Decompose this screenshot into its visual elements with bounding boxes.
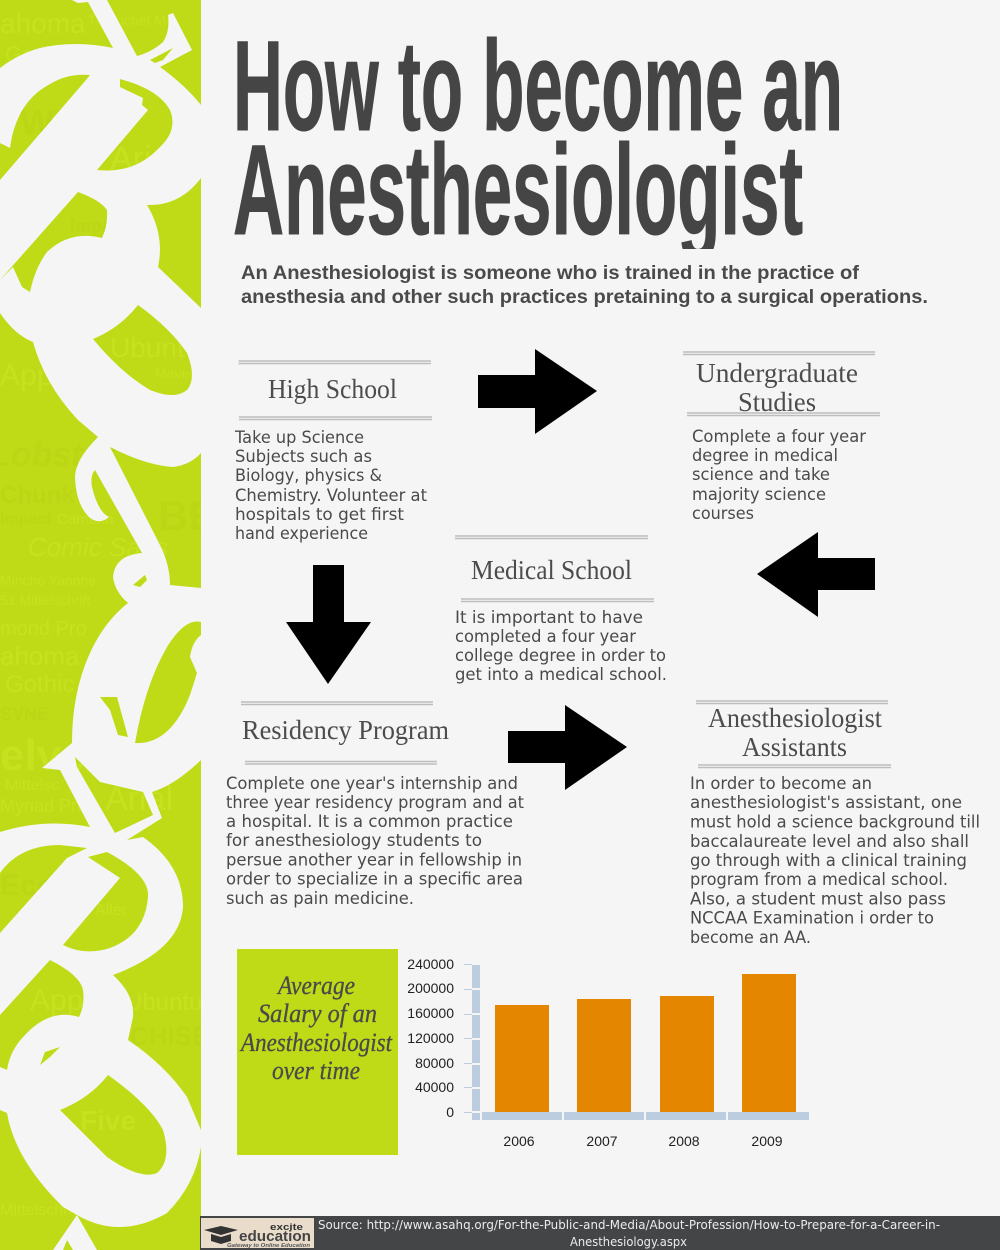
- text: High School description: Chemistry. Volunteer at: [235, 486, 428, 505]
- text: Assistants description: In order to become an: [690, 774, 872, 793]
- text: Assistants description: become an AA.: [690, 928, 811, 947]
- chart y axis labels: 0: [446, 1104, 454, 1120]
- text: Residency description: a hospital. It is a common practice: [226, 812, 513, 831]
- panel: decorative green sidebar with white letterforms: CHISE: [130, 1021, 209, 1051]
- chart x axis labels: 2007: [586, 1133, 618, 1149]
- logo: excite education: education: [239, 1228, 311, 1245]
- text: Assistants description: baccalaureate level and also shall: [690, 832, 969, 851]
- chart y axis labels: 200000: [407, 980, 454, 996]
- text: Undergraduate description: degree in medical: [692, 446, 838, 465]
- text: Residency description: three year residency program and at: [226, 793, 525, 812]
- panel: decorative green sidebar with white letterforms: Impact: [70, 216, 128, 236]
- panel: decorative green sidebar with white letterforms: Gothic: [5, 42, 69, 67]
- arrow: High School to Undergraduate Studies: [478, 349, 597, 434]
- text: Undergraduate description: [692, 427, 866, 523]
- text: salary callout label: [239, 971, 393, 1085]
- chart x axis labels: [503, 1133, 783, 1149]
- text: Undergraduate description: Complete a four year: [692, 427, 866, 446]
- text: Residency description: such as pain medicine.: [226, 889, 414, 908]
- text: Assistants description: must hold a science background till: [690, 812, 980, 832]
- text: Residency description: order to specialize in a specific area: [226, 870, 523, 888]
- text: salary callout label: Salary of an: [258, 999, 377, 1028]
- text: Assistants description: anesthesiologist's assistant, one: [690, 793, 962, 812]
- panel: decorative green sidebar with white letterforms: Mincho Yanone: [0, 572, 96, 588]
- chart y axis labels: 240000: [407, 956, 454, 972]
- logo: excite education: Gateway to Online Education: [227, 1243, 310, 1249]
- arrow: Residency Program to Anesthesiologist Assistants: [508, 705, 627, 790]
- icon: graduation cap: [204, 1226, 238, 1244]
- chart bars: [495, 974, 796, 1112]
- panel: decorative green sidebar with white letterforms: Comic Sans: [28, 532, 168, 562]
- text: High School description: Take up Science: [234, 428, 364, 447]
- heading: Medical School: Medical School: [471, 555, 632, 585]
- panel: decorative green sidebar with white letterforms: Ubuntu: [125, 989, 202, 1016]
- heading: Undergraduate Studies: Undergraduate: [696, 358, 858, 388]
- title: [234, 36, 840, 249]
- panel: decorative green sidebar with white letterforms: elve: [0, 731, 86, 780]
- heading: Anesthesiologist Assistants: [708, 703, 882, 762]
- chart x axis labels: 2009: [751, 1133, 783, 1149]
- panel: decorative green sidebar with white letterforms: Impact: [0, 511, 52, 528]
- chart x axis labels: 2006: [503, 1133, 535, 1149]
- subtitle text block: anesthesia and other such practices pretaining to a surgical operations.: [241, 286, 928, 308]
- text: High School description: Subjects such as: [235, 447, 372, 466]
- text: salary callout label: over time: [272, 1056, 360, 1085]
- panel: decorative green sidebar with white letterforms: [0, 0, 216, 1250]
- panel: Anesthesiologist Assistants: [690, 701, 980, 947]
- heading: High School: High School: [268, 374, 397, 404]
- text: High School description: hand experience: [235, 524, 368, 543]
- panel: decorative green sidebar with white letterforms: Apple: [0, 359, 77, 392]
- heading: Anesthesiologist Assistants: Anesthesiologist: [708, 703, 882, 733]
- text: Assistants description: Also, a student must also pass: [690, 890, 946, 908]
- panel: High School: [234, 361, 432, 543]
- panel: decorative green sidebar with white letterforms: BE: [158, 492, 216, 539]
- source text: Anesthesiology.aspx: [570, 1234, 687, 1249]
- panel: decorative green sidebar with white letterforms: Aller: [95, 902, 128, 919]
- chart y axis labels: 80000: [415, 1055, 454, 1071]
- text: Undergraduate description: majority science: [692, 485, 826, 504]
- chart x axis labels: 2008: [668, 1133, 700, 1149]
- text: Medical School description: [455, 608, 667, 684]
- logo: excite education: [201, 1218, 314, 1249]
- source text: Source: http://www.asahq.org/For-the-Public-and-Media/About-Profession/How-to-Prepare-for-a-Career-in-: [318, 1217, 940, 1232]
- text: Assistants description: [690, 774, 980, 947]
- panel: decorative green sidebar with white letterforms: Mittelsc: [5, 777, 59, 794]
- subtitle text block: [241, 262, 928, 308]
- panel: decorative green sidebar with white letterforms: Arial: [105, 780, 173, 818]
- chart y axis labels: 160000: [407, 1005, 454, 1021]
- text: High School description: hospitals to get first: [235, 505, 405, 524]
- panel: decorative green sidebar with white letterforms: Trebuchet MS: [88, 12, 175, 28]
- heading: Anesthesiologist Assistants: Assistants: [742, 732, 847, 762]
- text: Residency description: for anesthesiology students to: [226, 831, 482, 850]
- text: Residency description: Complete one year's internship and: [226, 774, 518, 793]
- text: Assistants description: NCCAA Examination i order to: [690, 908, 934, 928]
- panel: decorative green sidebar with white letterforms: Five: [80, 1105, 136, 1136]
- bar chart: average salary by year: [407, 956, 809, 1149]
- logo: excite education: excite: [270, 1222, 303, 1232]
- text: salary callout label: Average: [276, 971, 355, 1000]
- chart y axis labels: 40000: [415, 1079, 454, 1095]
- arrow: Undergraduate Studies to Medical School: [757, 532, 875, 617]
- panel: decorative green sidebar with white letterforms: ahoma: [0, 641, 80, 671]
- text: Residency description: [226, 774, 525, 908]
- panel: decorative green sidebar with white letterforms: Ubuntu: [110, 332, 200, 363]
- subtitle text block: An Anesthesiologist is someone who is trained in the practice of: [241, 262, 860, 284]
- panel: decorative green sidebar with white letterforms: SVNE: [0, 704, 49, 724]
- text: salary callout label: Anesthesiologist: [239, 1028, 393, 1057]
- panel: decorative green sidebar with white letterforms: Eco: [0, 869, 55, 902]
- panel: Medical School: [455, 536, 667, 684]
- text: High School description: [234, 428, 428, 543]
- arrow: High School to Residency Program: [286, 565, 371, 684]
- chart y axis labels: 120000: [407, 1030, 454, 1046]
- panel: decorative green sidebar with white letterforms: ahoma: [0, 8, 86, 39]
- panel: Undergraduate Studies: [683, 352, 880, 523]
- panel: decorative green sidebar with white letterforms: 51 Mittelschrift: [0, 592, 90, 608]
- text: Undergraduate description: science and take: [692, 465, 830, 484]
- panel: Residency Program: [226, 702, 525, 908]
- text: Residency description: persue another year in fellowship in: [226, 850, 522, 870]
- heading: Undergraduate Studies: [696, 358, 858, 417]
- text: Medical School description: It is important to have: [455, 608, 643, 627]
- text: Medical School description: get into a medical school.: [455, 665, 667, 684]
- panel: decorative green sidebar with white letterforms: Gothic: [5, 671, 74, 698]
- panel: decorative green sidebar with white letterforms: mond Pro: [0, 618, 87, 640]
- panel: decorative green sidebar with white letterforms: Mittelschrift: [0, 1202, 81, 1219]
- chart axes: [464, 964, 809, 1120]
- source text: [318, 1217, 940, 1249]
- panel: decorative green sidebar with white letterforms: Myriad Pro: [0, 796, 87, 816]
- text: Assistants description: go through with a clinical training: [690, 851, 967, 870]
- footer bar: [200, 1216, 1000, 1250]
- panel: salary callout: [237, 949, 398, 1155]
- panel: decorative green sidebar with white letterforms: Cambria: [57, 511, 114, 528]
- panel: decorative green sidebar with white letterforms: Maven: [155, 365, 197, 381]
- chart y axis labels: [407, 956, 454, 1120]
- text: High School description: Biology, physics &: [235, 466, 382, 485]
- panel: decorative green sidebar with white letterforms: Apple: [30, 984, 107, 1017]
- heading: Residency Program: Residency Program: [242, 715, 449, 745]
- panel: decorative green sidebar with white letterforms: Arial: [110, 140, 178, 178]
- text: Assistants description: program from a medical school.: [690, 870, 948, 889]
- panel: decorative green sidebar with white letterforms: Word: [20, 102, 111, 143]
- text: Medical School description: college degree in order to: [455, 646, 666, 665]
- text: Undergraduate description: courses: [692, 504, 754, 523]
- text: Medical School description: completed a four year: [455, 627, 636, 646]
- panel: decorative green sidebar with white letterforms: Chunk: [0, 482, 75, 509]
- heading: Undergraduate Studies: Studies: [738, 387, 816, 417]
